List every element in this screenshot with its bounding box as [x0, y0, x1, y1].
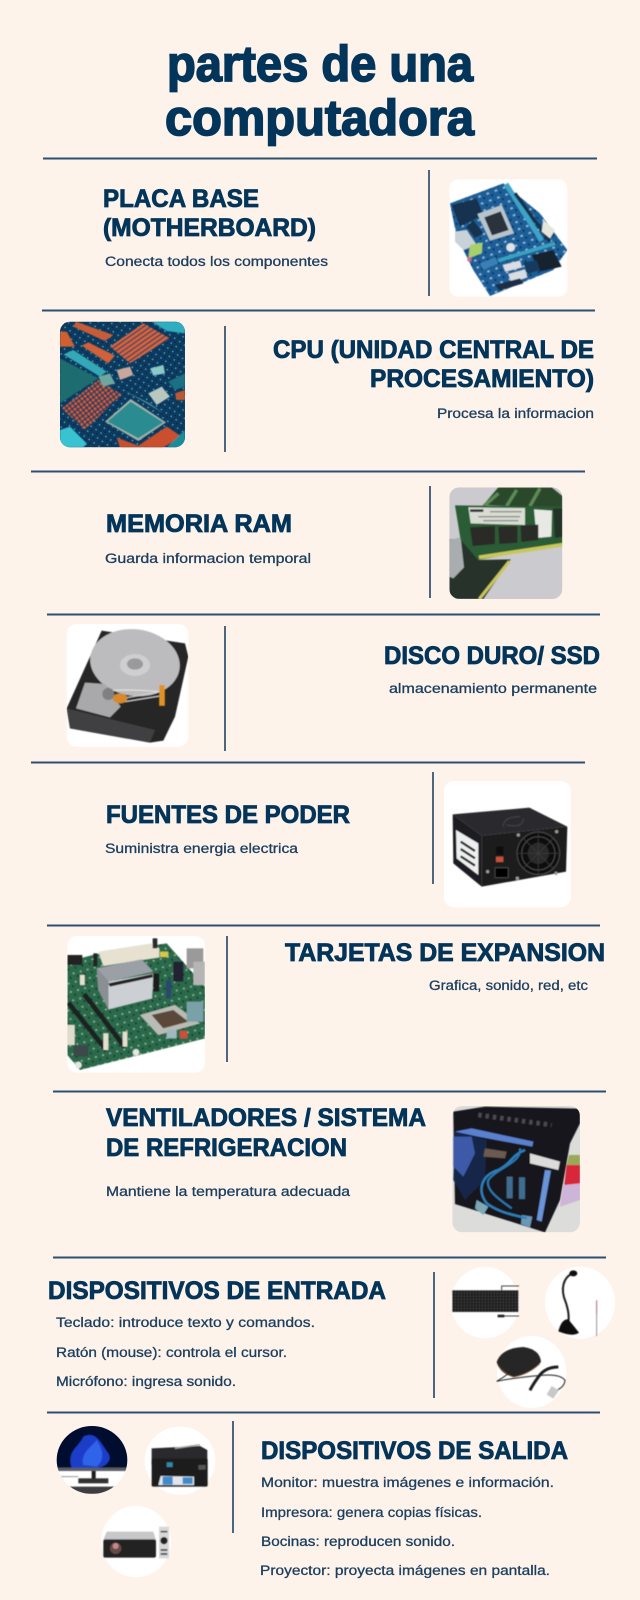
heading: dispositivos de entrada: DISPOSITIVOS DE ENTRADA: [48, 1277, 386, 1305]
list: dispositivos de salida: Proyector: proyecta imágenes en pantalla.: [260, 1563, 550, 1578]
icon: liquid cooled case photo: [452, 1106, 580, 1232]
heading: disco duro: DISCO DURO/ SSD: [384, 642, 600, 670]
description: tarjetas de expansion: Grafica, sonido, red, etc: [429, 978, 588, 993]
icon: printer: [145, 1427, 215, 1495]
panel: ventiladores: [106, 1104, 580, 1232]
heading: tarjetas de expansion: TARJETAS DE EXPANSION: [285, 939, 605, 967]
heading: memoria ram: MEMORIA RAM: [106, 510, 292, 538]
heading: cpu: [273, 336, 594, 393]
description: cpu: Procesa la informacion: [437, 406, 594, 421]
heading: placa base: [103, 185, 316, 242]
heading: placa base: (MOTHERBOARD): [103, 214, 316, 242]
panel: tarjetas de expansion: [67, 936, 605, 1073]
icon: motherboard photo: [449, 179, 567, 297]
icon: ram photo: [449, 487, 562, 599]
icon: keyboard: [451, 1267, 519, 1338]
heading: ventiladores: DE REFRIGERACION: [106, 1134, 347, 1162]
icon: expansion board photo: [67, 936, 205, 1073]
description: fuentes de poder: Suministra energia electrica: [105, 841, 299, 856]
list: dispositivos de salida: Monitor: muestra imágenes e información.: [261, 1475, 554, 1490]
heading: ventiladores: VENTILADORES / SISTEMA: [106, 1104, 426, 1132]
list: dispositivos de salida: Bocinas: reproducen sonido.: [261, 1534, 455, 1549]
panel: dispositivos de salida: [55, 1421, 568, 1578]
icons: output devices: [55, 1425, 215, 1577]
panel: disco duro: [67, 623, 600, 751]
list: dispositivos de entrada: Teclado: introduce texto y comandos.: [56, 1315, 315, 1330]
icon: cpu circuit photo: [60, 322, 185, 447]
title: computadora: [165, 90, 475, 146]
icon: hard drive photo: [67, 623, 188, 747]
title: [165, 36, 475, 146]
panel: placa base: [103, 170, 567, 297]
heading: placa base: PLACA BASE: [103, 185, 259, 213]
description: memoria ram: Guarda informacion temporal: [105, 551, 311, 566]
list: dispositivos de salida: [260, 1475, 554, 1578]
icon: monitor: [55, 1425, 129, 1494]
heading: ventiladores: [106, 1104, 426, 1162]
list: dispositivos de salida: Impresora: genera copias físicas.: [261, 1505, 482, 1520]
panel: cpu: [60, 322, 594, 452]
panel: fuentes de poder: [105, 772, 571, 907]
description: placa base: Conecta todos los componentes: [105, 254, 328, 269]
icon: projector: [101, 1506, 171, 1577]
icon: power supply photo: [444, 781, 571, 907]
icon: microphone: [545, 1267, 615, 1339]
list: dispositivos de entrada: Micrófono: ingresa sonido.: [56, 1374, 236, 1389]
description: disco duro: almacenamiento permanente: [389, 681, 597, 696]
heading: cpu: PROCESAMIENTO): [370, 365, 594, 393]
heading: fuentes de poder: FUENTES DE PODER: [106, 801, 350, 829]
title: partes de una: [167, 36, 474, 92]
panel: memoria ram: [105, 486, 562, 599]
panel: dispositivos de entrada: [48, 1267, 615, 1408]
icon: mouse: [497, 1336, 566, 1408]
list: dispositivos de entrada: [56, 1315, 315, 1389]
heading: cpu: CPU (UNIDAD CENTRAL DE: [273, 336, 594, 364]
heading: dispositivos de salida: DISPOSITIVOS DE SALIDA: [261, 1437, 568, 1465]
description: ventiladores: Mantiene la temperatura adecuada: [106, 1184, 351, 1199]
icons: input devices: [451, 1267, 615, 1408]
list: dispositivos de entrada: Ratón (mouse): controla el cursor.: [56, 1345, 287, 1360]
